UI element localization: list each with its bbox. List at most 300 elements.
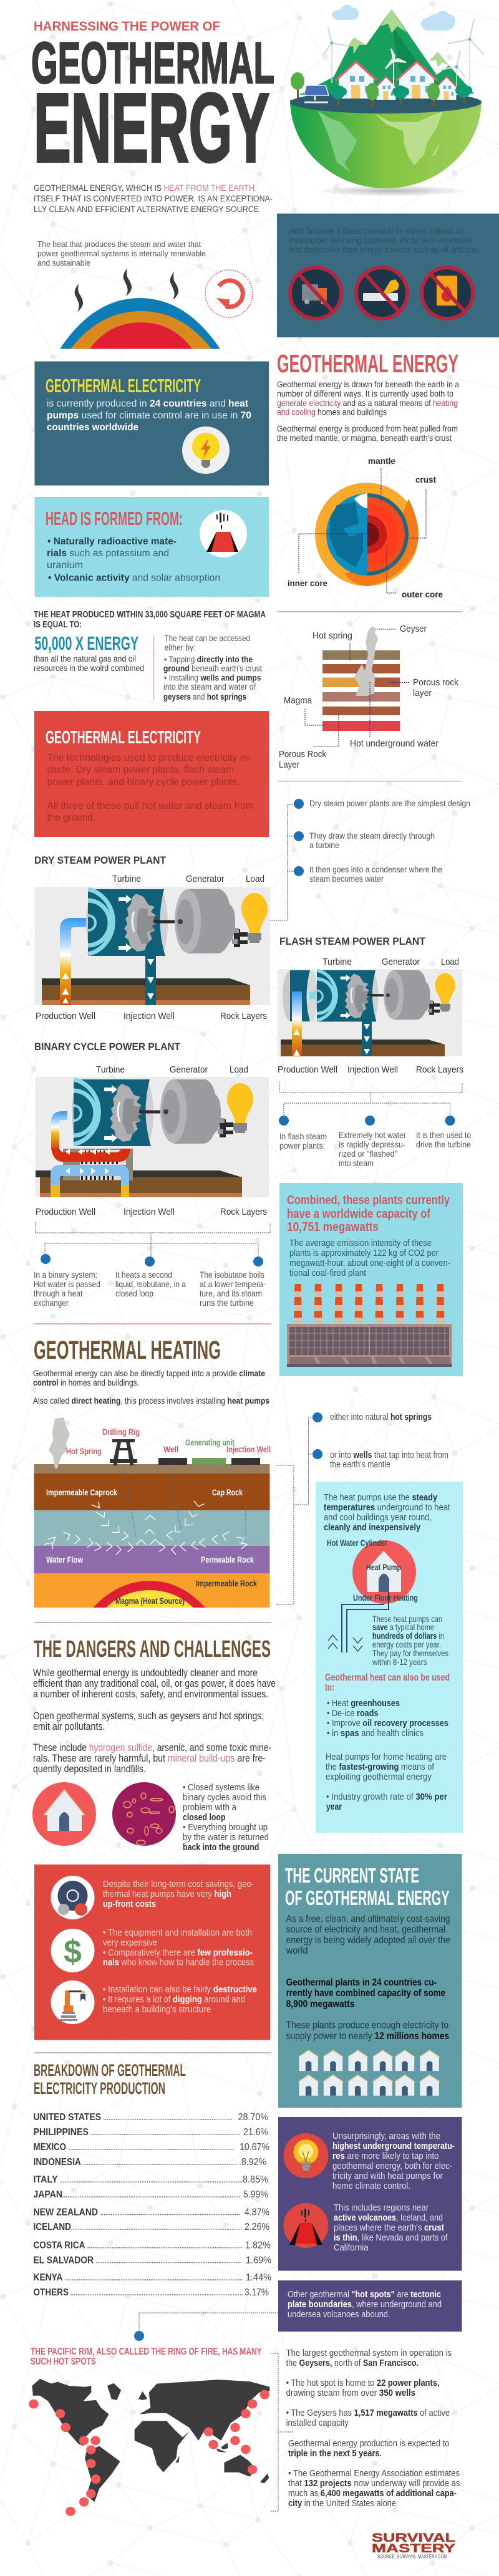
panel text: megawatt-hour, about one-eight of a conven- (289, 1258, 450, 1268)
earth layer labels: mantle (368, 456, 395, 466)
callout text: In flash steam (279, 1131, 327, 1141)
callout text: They draw the steam directly through (309, 831, 435, 841)
panel: geothermal electricity countries (35, 362, 269, 485)
labels: dry steam top (112, 874, 264, 884)
labels: dry steam top: Generator (186, 874, 225, 884)
panel heading: other uses: to: (325, 1682, 334, 1693)
icon: earth dome with rising heat (60, 268, 220, 349)
icon: light bulb (182, 427, 230, 474)
title line 1: GEOTHERMAL (31, 30, 274, 95)
geyser diagram labels (279, 624, 459, 770)
panel text: fastest growing (326, 1752, 447, 1812)
heading: pacific rim: SUCH HOT SPOTS (31, 2357, 96, 2367)
panel: head is formed from (35, 497, 269, 597)
panel text: adoption: world (286, 1946, 308, 1956)
text: renewable heat: and sustainable (37, 258, 90, 268)
panel heading: other uses: Geothermal heat can also be used (325, 1672, 450, 1683)
geyser diagram labels: Layer (279, 760, 299, 770)
panel heading: have a worldwide capacity of (287, 1207, 430, 1221)
panel text: undersea volcanoes abound. (288, 2310, 390, 2320)
diagram labels: Cap Rock (212, 1488, 243, 1497)
surface units (158, 1458, 260, 1465)
panel heading: GEOTHERMAL ELECTRICITY (46, 728, 201, 748)
heading: geothermal heating: GEOTHERMAL HEATING (34, 1335, 221, 1364)
icon: drilling rig (110, 1439, 137, 1465)
panel text: adoption: energy is being widely adopted all over the (286, 1935, 450, 1946)
icons: twelve houses (298, 2050, 440, 2096)
illustration: heat pump house: Heat Pump (366, 1563, 401, 1572)
panel text: capacity (286, 1977, 445, 2009)
text: dangers paragraphs: While geothermal energy is undoubtedly cleaner and more (33, 1667, 258, 1679)
panel text: savings: They pay for themselves (372, 1649, 448, 1658)
panel: combined capacity (279, 1183, 463, 1376)
labels: dry steam top: Load (246, 874, 264, 884)
callout text: Hot water is passed (34, 1279, 100, 1289)
callout text: drive the turbine (416, 1139, 471, 1149)
labels: dry steam bottom: Production Well (36, 1011, 95, 1021)
icon: no trucks (290, 268, 341, 319)
fact heading (34, 610, 266, 630)
panel: high temperature areas (278, 2117, 462, 2271)
panel text: steady temperatures: temperatures underground to heat (324, 1502, 450, 1513)
panel text: And, because it doesn't need to be mined, refined, or (289, 226, 463, 236)
table: production by country: MEXICO (34, 2142, 66, 2153)
icon: mineral deposits circle (112, 1782, 176, 1846)
panel text: • Volcanic activity and solar absorption (48, 572, 220, 584)
chart: earth layers cross-section (288, 456, 443, 599)
panel text: steady temperatures: The heat pumps use the steady (324, 1492, 438, 1503)
intro paragraph: ITSELF THAT IS CONVERTED INTO POWER, IS AN EXCEPTIONA- (34, 194, 273, 203)
text: the geysers: The largest geothermal system in operation is (286, 2348, 452, 2358)
panel: cost and installation challenges (34, 1864, 270, 2040)
panel text: Unsurprisingly, areas with the (332, 2131, 440, 2141)
fact text: than all the natural gas and oil (34, 654, 136, 663)
text: geothermal heating intro: control in homes and buildings. (33, 1377, 139, 1387)
panel text: countries worldwide (47, 422, 138, 433)
text: future growth: • The Geothermal Energy Association estimates (288, 2469, 460, 2479)
table: production by country: PHILIPPINES (34, 2127, 89, 2138)
diagram labels: Impermeable Rock (196, 1579, 257, 1588)
callout text: It then goes into a condenser where the (309, 864, 442, 874)
panel text: homes: These plants produce enough electricity to (286, 2020, 448, 2030)
panel text: uranium (47, 560, 83, 571)
heading: dry steam power plant: DRY STEAM POWER PLANT (34, 854, 167, 866)
panel text: Other geothermal "hot spots" are tectonic (288, 2290, 441, 2300)
earth layer labels: crust (415, 475, 436, 485)
text: dangers paragraphs: quently deposited in landfills. (33, 1763, 146, 1775)
geyser diagram labels: layer (413, 688, 432, 698)
callouts: flash steam facts (279, 1082, 471, 1168)
geyser diagram labels: Geyser (400, 624, 427, 634)
text: geothermal energy intro: and cooling homes and buildings (277, 408, 387, 417)
table: production by country: 1.82% (245, 2241, 271, 2251)
panel text: thermal heat pumps have very high (103, 1889, 231, 1899)
panel text (47, 398, 251, 433)
table: production by country: ICELAND (34, 2222, 71, 2232)
intro paragraph: GEOTHERMAL ENERGY, WHICH IS HEAT FROM THE EARTH (34, 183, 254, 193)
diagram labels: Hot Spring (66, 1447, 102, 1456)
text: closed systems: • Everything brought up (183, 1822, 268, 1833)
big number: 50,000 X ENERGY (35, 632, 138, 654)
panel text: fastest growing: • Industry growth rate of 30% per (326, 1792, 447, 1802)
text: renewable heat (37, 239, 206, 268)
map: ring of fire hot spots (29, 2379, 269, 2516)
callout text: power plants: (279, 1141, 325, 1151)
panel text (288, 2290, 442, 2320)
panel text: • It requires a lot of digging around and (103, 1995, 245, 2005)
callout text: a turbine (309, 840, 339, 850)
panel text: This includes regions near (334, 2203, 429, 2213)
callout text (330, 1412, 448, 1470)
panel text: savings: hundreds of dollars in (372, 1631, 444, 1641)
geyser diagram labels: Magma (284, 696, 312, 706)
labels: binary cycle top: Generator (170, 1064, 208, 1075)
text: renewable heat: The heat that produces the steam and water that (37, 239, 201, 249)
labels: binary cycle top (96, 1064, 248, 1075)
panel text: savings: energy costs per year. (372, 1640, 441, 1649)
table: production by country: 2.26% (245, 2222, 269, 2232)
icon: dollar sign: $ (64, 1934, 82, 1970)
logo: survival mastery: SURVIVAL (372, 2532, 456, 2545)
text: closed systems: • Closed systems like (183, 1782, 259, 1793)
panel text: fastest growing: Heat pumps for home heating are (326, 1752, 447, 1762)
text: how heat is accessed: either by: (165, 643, 196, 652)
panel text: California (334, 2243, 369, 2253)
panel heading (285, 1864, 449, 1909)
panel heading: other uses (325, 1672, 450, 1693)
text: future growth: much as 6,400 megawatts of additional capa- (288, 2489, 457, 2499)
icon: renewable cycle arrow (205, 270, 253, 317)
table: production by country: .8.92% (239, 2157, 266, 2168)
labels: flash steam top: Load (441, 957, 459, 967)
panel text (289, 226, 479, 254)
text: closed systems: by the water is returned (183, 1832, 269, 1843)
table: production by country: 8.85% (243, 2174, 268, 2185)
text: dangers paragraphs: Open geothermal systems, such as geysers and hot springs, (33, 1710, 264, 1722)
table: production by country: COSTA RICA (34, 2241, 85, 2251)
table: production by country: 28.70% (238, 2112, 268, 2123)
chart: geyser rock layers (279, 624, 459, 770)
panel text: pumps used for climate control are in use in 70 (47, 410, 251, 421)
panel text: very expensive (103, 1938, 157, 1948)
logo: survival mastery: SOURCE: SURVIVAL-MASTERY.COM (377, 2554, 447, 2559)
panel text: homes: supply power to nearly 12 millions homes (286, 2031, 449, 2042)
labels: binary cycle top: Turbine (96, 1064, 125, 1075)
panel text: The technologies used to produce electricity in- (47, 753, 251, 763)
fact: heat within magma (34, 610, 266, 673)
text: the geysers: • The Geysers has 1,517 megawatts of active (286, 2408, 450, 2418)
panel heading: THE CURRENT STATE (285, 1864, 419, 1887)
text: geothermal heating intro: Geothermal energy can also be directly tapped into a provide climate (33, 1368, 265, 1378)
geyser diagram labels: Hot spring (312, 631, 352, 641)
panel text: capacity: rrently have combined capacity of some (286, 1988, 445, 1999)
callout text: The isobutane boils (200, 1270, 264, 1280)
illustration: heat pump house: Under Floor Heating (353, 1593, 418, 1603)
icon: house circle (32, 1782, 96, 1846)
panel text: fastest growing: the fastest-growing means of (326, 1762, 435, 1772)
panel list: other uses: • Heat greenhouses (327, 1698, 400, 1709)
icon: gears (51, 1876, 95, 1919)
fact heading: THE HEAT PRODUCED WITHIN 33,000 SQUARE FEET OF MAGMA (34, 610, 266, 620)
panel: geothermal electricity technologies (34, 711, 269, 837)
text: geothermal energy intro: generate electricity and as a natural means of heating (277, 398, 458, 408)
labels: dry steam bottom (36, 1011, 267, 1021)
fact text (34, 654, 144, 673)
text: how heat is accessed: ground beneath earth's crust (163, 663, 262, 673)
callout text: ture, and its steam (200, 1288, 262, 1298)
panel text: fastest growing: exploiting geothermal energy (326, 1772, 432, 1782)
logo: survival mastery: MASTERY (372, 2542, 455, 2555)
text: dangers paragraphs: These include hydrogen sulfide, arsenic, and some toxic mine- (33, 1742, 271, 1754)
text: geothermal energy intro: number of different ways. It is currently used both to (277, 389, 453, 398)
panel text: capacity: Geothermal plants in 24 countries cu- (286, 1977, 437, 1988)
panel text: adoption: As a free, clean, and ultimately cost-saving (286, 1914, 450, 1924)
diagram: geothermal underground cross-section (34, 1417, 271, 1608)
panel text (47, 536, 220, 584)
callout text: Extremely hot water (339, 1130, 406, 1140)
panel text: savings: within 8-12 years (372, 1657, 427, 1667)
panel text: adoption (286, 1914, 450, 1956)
panel text: fastest growing: year (326, 1802, 342, 1812)
heading: binary cycle power plant: BINARY CYCLE POWER PLANT (34, 1041, 181, 1053)
labels: binary cycle top: Load (230, 1064, 248, 1075)
text: how heat is accessed: into the steam and water of (163, 682, 256, 692)
text: how heat is accessed (163, 634, 262, 702)
table: production by country: JAPAN (34, 2189, 62, 2200)
callout text: or into wells that tap into heat from (330, 1450, 448, 1460)
panel text: • The equipment and installation are both (103, 1928, 252, 1938)
diagram labels: Generating unit (185, 1438, 235, 1447)
panel text: power plants, and binary cycle power plants. (47, 777, 240, 788)
panel heading: HEAD IS FORMED FROM: (46, 508, 183, 529)
callout text: liquid, isobutane, in a (115, 1279, 186, 1289)
callout text: It is then used to (416, 1130, 471, 1140)
panel text: is currently produced in 24 countries and heat (47, 398, 248, 409)
panel text: capacity: 8,900 megawatts (286, 1999, 355, 2009)
panel text: All three of these pull hot water and steam from (47, 801, 254, 811)
intro paragraph (34, 183, 273, 214)
table: production by country: 1.69% (246, 2255, 271, 2266)
heading: breakdown: BREAKDOWN OF GEOTHERMAL (34, 2061, 186, 2080)
panel text: Despite their long-term cost savings, geo- (103, 1879, 254, 1889)
panel text (332, 2131, 455, 2253)
panel text: homes (286, 2020, 449, 2042)
text: how heat is accessed: The heat can be accessed (165, 634, 250, 643)
text: geothermal energy intro: the melted mantle, or magma, beneath earth's crust (277, 433, 452, 443)
illustration: heat pump house (327, 1538, 418, 1652)
panel: heat pumps (316, 1482, 463, 1833)
text: future growth: city in the United States alone (288, 2499, 396, 2509)
text: how heat is accessed: • Installing wells and pumps (164, 673, 261, 682)
text: dangers paragraphs: a number of inherent costs, safety, and environmental issues. (33, 1689, 268, 1700)
labels: flash steam bottom: Rock Layers (416, 1064, 463, 1075)
diagram labels: Magma (Heat Source) (115, 1596, 185, 1606)
text: geothermal heating intro: Also called direct heating, this process involves installing heat pumps (33, 1396, 269, 1406)
panel text: places where the earth's crust (334, 2223, 444, 2233)
diagram labels (46, 1427, 271, 1606)
text: closed systems: back into the ground (183, 1842, 259, 1853)
heading: flash steam power plant: FLASH STEAM POWER PLANT (279, 935, 426, 947)
table: production by country: INDONESIA (34, 2157, 81, 2168)
callout text: Dry steam power plants are the simplest design (309, 798, 470, 808)
panel heading (287, 1194, 450, 1234)
panel text (289, 1238, 450, 1278)
table: production by country: 21.6% (243, 2127, 268, 2138)
illustration: power plant with chimneys (287, 1284, 452, 1367)
panel text: The average emission intensity of these (289, 1238, 432, 1248)
text: geothermal energy intro: Geothermal energy is produced from heat pulled from (277, 424, 458, 433)
labels: binary cycle bottom (36, 1207, 267, 1217)
text: future growth: triple in the next 5 years. (288, 2449, 382, 2459)
labels: binary cycle bottom: Production Well (36, 1207, 95, 1217)
icon: volcano (200, 510, 247, 557)
panel text: active volcanoes, Iceland, and (334, 2213, 443, 2223)
panel text: transported over long distances, it's far less expensive (289, 236, 472, 245)
geyser diagram labels: Hot underground water (350, 739, 438, 749)
illustration: heat pump house: Hot Water Cylinder (327, 1538, 388, 1548)
text: closed systems: closed loop (183, 1812, 226, 1823)
table: production by country: 5.99% (243, 2189, 268, 2200)
labels: dry steam bottom: Rock Layers (220, 1011, 267, 1021)
logo: survival mastery (372, 2532, 456, 2559)
callout text: rized or "flashed" (339, 1149, 397, 1159)
callout text: is rapidly depressu- (339, 1139, 405, 1149)
earth layer labels (288, 456, 443, 599)
panel list: other uses: • Improve oil recovery processes (327, 1718, 448, 1729)
illustration: globe with village (290, 5, 484, 196)
callout text: the earth's mantle (330, 1460, 390, 1470)
labels: flash steam bottom: Injection Well (347, 1064, 398, 1075)
table: production by country: 1.44% (246, 2272, 271, 2283)
panel text: beneath a building's structure (103, 2005, 211, 2015)
text: closed systems: binary cycles avoid this (183, 1792, 266, 1803)
earth layer labels: inner core (288, 578, 327, 588)
diagram labels: Injection Well (226, 1445, 271, 1454)
callout text: runs the turbine (200, 1298, 254, 1308)
text: future growth: Geothermal energy production is expected to (288, 2439, 449, 2449)
table: production by country: NEW ZEALAND (34, 2207, 98, 2217)
text: dangers paragraphs (33, 1667, 276, 1775)
text: the geysers: the Geysers, north of San Francisco. (286, 2358, 419, 2368)
panel text: steady temperatures (324, 1492, 450, 1533)
text: dangers paragraphs: rals. These are rarely harmful, but mineral build-ups are fre- (33, 1753, 266, 1764)
labels: flash steam bottom: Production Well (278, 1064, 337, 1075)
panel text: home climate control. (332, 2181, 410, 2191)
fact heading: IS EQUAL TO: (34, 620, 82, 630)
callout text: In a binary system: (34, 1270, 97, 1280)
diagram: dry steam power plant (35, 887, 270, 1005)
panel text (47, 753, 254, 823)
diagram labels: Water Flow (46, 1555, 83, 1565)
intro paragraph: LLY CLEAN AND EFFICIENT ALTERNATIVE ENERGY SOURCE (34, 205, 259, 214)
labels: flash steam bottom (278, 1064, 463, 1075)
text: geothermal heating intro (33, 1368, 269, 1406)
callout text: at a lower tempera- (200, 1279, 266, 1289)
panel text: plants is approximately 122 kg of CO2 per (289, 1248, 438, 1258)
text: future growth: that 132 projects now underway will provide as (288, 2479, 460, 2489)
text: how heat is accessed: geysers and hot springs (163, 692, 246, 702)
callout text (34, 1270, 266, 1308)
title line 2: ENERGY (34, 74, 269, 183)
callout text (309, 798, 470, 884)
table: production by country: KENYA (34, 2272, 62, 2283)
panel text: the ground. (47, 813, 95, 823)
labels: flash steam top: Turbine (322, 957, 352, 967)
panel text: savings: save a typical home (372, 1623, 434, 1632)
panel text: res are more likely to tap into (332, 2151, 439, 2161)
text: geothermal energy intro (277, 380, 459, 443)
panel list: other uses: • De-ice roads (327, 1708, 378, 1719)
earth layer labels: outer core (402, 589, 443, 599)
text: the geysers: drawing steam from over 350 wells (286, 2388, 415, 2398)
panel text: savings: These heat pumps can (372, 1614, 442, 1624)
panel text: geothermal energy, both for elec- (332, 2161, 452, 2171)
table: production by country: ITALY (34, 2174, 58, 2185)
callout text: closed loop (115, 1288, 153, 1298)
title block (31, 19, 274, 183)
panel text: highest underground temperatu- (332, 2141, 455, 2151)
panel text: adoption: source of electricity and heat, geothermal (286, 1924, 445, 1935)
callouts: where the pumps tap in (276, 1412, 448, 1604)
panel text: steady temperatures: cleanly and inexpensively (324, 1522, 421, 1533)
diagram labels: Drilling Rig (102, 1427, 140, 1437)
text: future growth (288, 2439, 460, 2509)
text: geothermal energy intro: Geothermal energy is drawn for beneath the earth in a (277, 380, 459, 389)
panel text: steady temperatures: and cool buildings year round, (324, 1512, 432, 1523)
panel text: • Installation can also be fairly destructive (103, 1985, 257, 1995)
earth layer leader lines (299, 468, 426, 593)
panel text: and destructive than energy sources such as oil and coal (289, 245, 479, 254)
callout text: steam becomes water (309, 874, 384, 884)
callout text: exchanger (34, 1298, 69, 1308)
labels: dry steam bottom: Injection Well (124, 1011, 175, 1021)
diagram labels: Impermeable Caprock (46, 1488, 117, 1497)
table: production by country: 10.67% (240, 2142, 269, 2153)
geyser diagram labels: Porous Rock (279, 750, 327, 760)
text: the geysers (286, 2348, 452, 2428)
panel heading: 10,751 megawatts (287, 1220, 379, 1234)
callout text (279, 1130, 471, 1168)
labels: binary cycle bottom: Injection Well (124, 1207, 175, 1217)
icon: robot arm (51, 1980, 95, 2024)
heading: pacific rim (31, 2347, 262, 2367)
icon: hot spring plume (49, 1417, 70, 1469)
heading: breakdown (34, 2061, 186, 2098)
kicker: HARNESSING THE POWER OF (34, 19, 220, 34)
geyser diagram labels: Porous rock (413, 678, 459, 688)
text: dangers paragraphs: emit air pollutants. (33, 1721, 105, 1732)
panel list: other uses: • in spas and health clinics (327, 1728, 424, 1739)
text: closed systems (183, 1782, 269, 1853)
panel text: rials such as potassium and (47, 548, 169, 559)
text: the geysers: • The hot spot is home to 22 power plants, (286, 2378, 439, 2388)
text: how heat is accessed: • Tapping directly into the (164, 655, 253, 664)
table: production by country: 4.87% (245, 2207, 269, 2217)
callout text: through a heat (34, 1288, 83, 1298)
panel text: tricity and with heat pumps for (332, 2171, 443, 2181)
text: renewable heat: power geothermal systems is eternally renewable (37, 249, 206, 258)
table: production by country: EL SALVADOR (34, 2255, 94, 2266)
panel text: up-front costs (103, 1899, 156, 1909)
panel: tectonic hot spots (278, 2280, 462, 2332)
panel heading: Combined, these plants currently (287, 1194, 450, 1207)
diagram: binary cycle power plant (35, 1077, 269, 1197)
panel text: nals who know how to handle the process (103, 1958, 254, 1968)
icon: bulb (283, 2133, 328, 2178)
panel text: plate boundaries, where underground and (288, 2300, 442, 2310)
fact text: resources in the wolrd combined (34, 663, 144, 673)
icon: volcano (283, 2203, 328, 2248)
